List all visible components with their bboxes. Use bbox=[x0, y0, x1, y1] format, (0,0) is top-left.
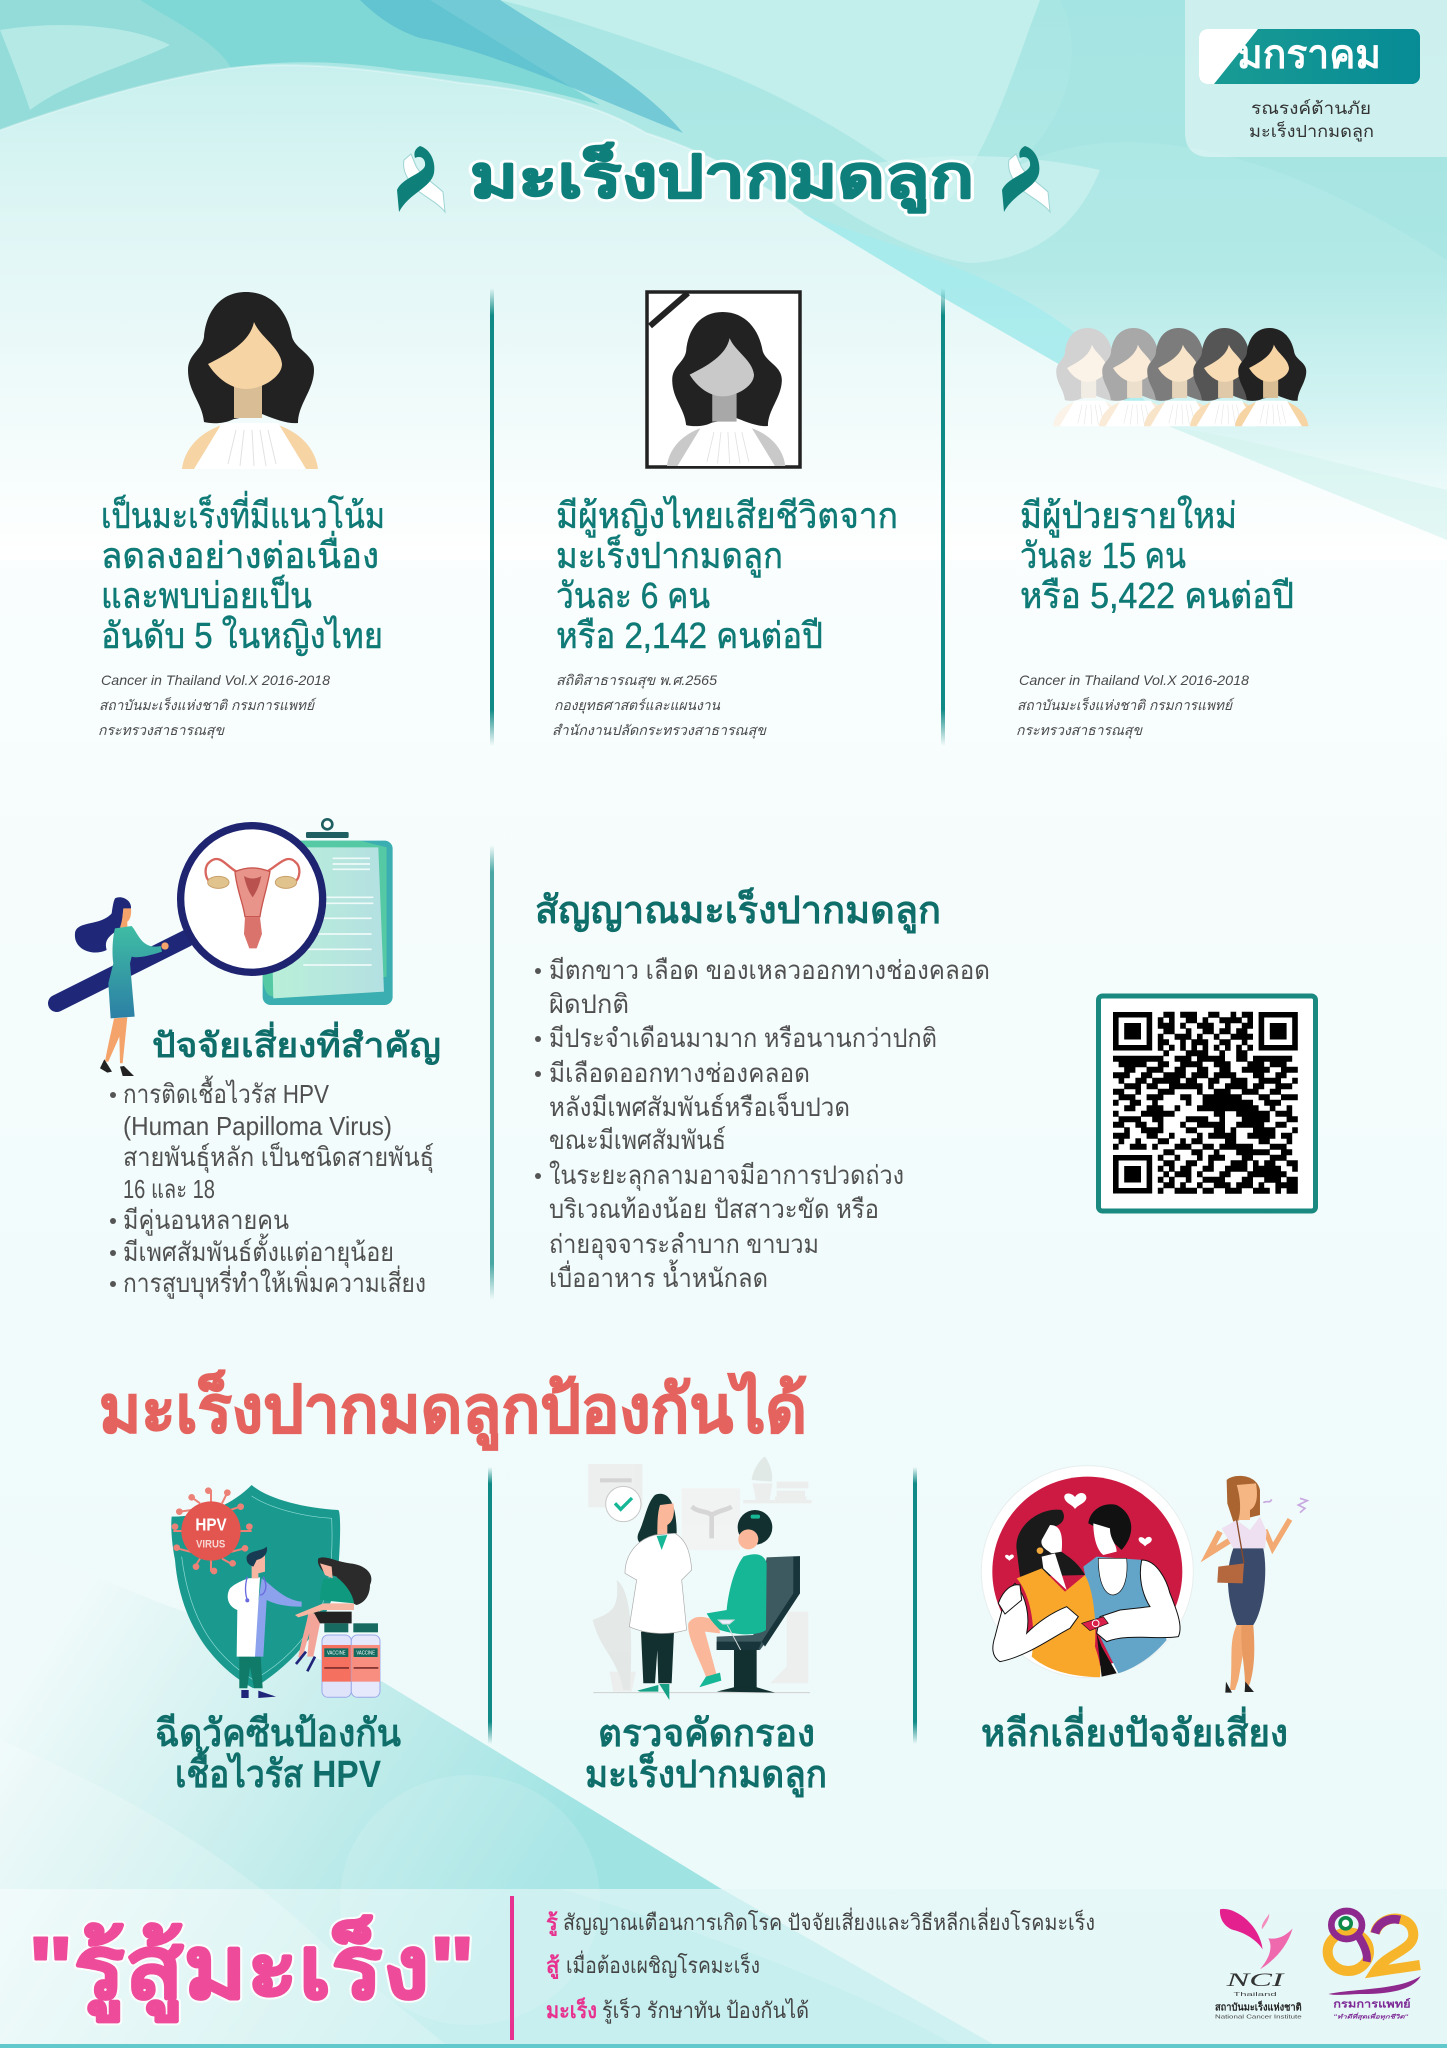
stat text: หรือ 2,142 คนต่อปี bbox=[556, 615, 823, 656]
list: risk factors: มีคู่นอนหลายคน bbox=[123, 1205, 289, 1236]
panel: trend statistic bbox=[98, 292, 385, 739]
logo: Department of Medical Services 82: "ทำดีที่สุดเพื่อทุกชีวิต" bbox=[1333, 2013, 1409, 2021]
source note: กองยุทธศาสตร์และแผนงาน bbox=[554, 697, 720, 714]
logo: National Cancer Institute: สถาบันมะเร็งแห่งชาติ bbox=[1215, 2000, 1302, 2014]
panel: new cases statistic bbox=[1016, 328, 1308, 739]
logo: National Cancer Institute: National Cancer Institute bbox=[1215, 2015, 1302, 2021]
title: มะเร็งปากมดลูก bbox=[470, 142, 974, 213]
label: screening: ตรวจคัดกรอง bbox=[598, 1713, 815, 1755]
slogan explanation: สัญญาณเตือนการเกิดโรค ปัจจัยเสี่ยงและวิธีหลีกเลี่ยงโรคมะเร็ง bbox=[563, 1907, 1095, 1935]
icon: woman bbox=[182, 292, 318, 469]
list: risk factors: การสูบบุหรี่ทำให้เพิ่มความเสี่ยง bbox=[123, 1265, 426, 1299]
list: risk factors: การติดเชื้อไวรัส HPV bbox=[123, 1075, 330, 1109]
logo: National Cancer Institute bbox=[1215, 1909, 1302, 2021]
heading: warning signs: สัญญาณมะเร็งปากมดลูก bbox=[535, 887, 941, 934]
illustration: doctor and patient bbox=[588, 1457, 812, 1700]
icon: five women bbox=[1053, 328, 1308, 426]
dividers: statistics row bbox=[490, 288, 494, 746]
stat text: วันละ 6 คน bbox=[556, 575, 710, 616]
source note: กระทรวงสาธารณสุข bbox=[1016, 722, 1143, 739]
slogan: "รู้สู้มะเร็ง" bbox=[28, 1914, 475, 2023]
illustration: couple and smoking woman bbox=[981, 1466, 1307, 1693]
list: warning signs: เบื่ออาหาร น้ำหนักลด bbox=[549, 1259, 768, 1293]
list: risk factors: (Human Papilloma Virus) bbox=[123, 1111, 392, 1141]
heading: risk factors: ปัจจัยเสี่ยงที่สำคัญ bbox=[152, 1021, 441, 1066]
stat text: อันดับ 5 ในหญิงไทย bbox=[101, 615, 383, 656]
stat text: เป็นมะเร็งที่มีแนวโน้ม bbox=[101, 491, 385, 536]
source note bbox=[98, 672, 330, 739]
illustration: HPV vaccination: VACCINE bbox=[356, 1651, 375, 1657]
logo: Department of Medical Services 82 bbox=[1328, 1911, 1421, 2021]
month tag panel bbox=[1185, 0, 1447, 157]
slogan: "รู้สู้มะเร็ง" bbox=[28, 1914, 475, 2023]
stat text: ลดลงอย่างต่อเนื่อง bbox=[101, 531, 379, 576]
stat text: และพบบ่อยเป็น bbox=[101, 573, 312, 616]
list: risk factors: สายพันธุ์หลัก เป็นชนิดสายพันธุ์ bbox=[123, 1141, 434, 1173]
panel: warning signs bbox=[535, 887, 990, 1293]
campaign text: มะเร็งปากมดลูก bbox=[1249, 120, 1374, 142]
illustration: HPV vaccination bbox=[171, 1485, 380, 1698]
label: vaccination: เชื้อไวรัส HPV bbox=[175, 1746, 382, 1796]
title: มะเร็งปากมดลูก bbox=[470, 142, 974, 213]
stat text bbox=[1020, 495, 1294, 616]
slogan explanation: รู้ bbox=[546, 1910, 558, 1937]
slogan explanation: มะเร็ง bbox=[546, 1996, 597, 2023]
source note: Cancer in Thailand Vol.X 2016-2018 bbox=[1019, 672, 1249, 688]
list: warning signs: ขณะมีเพศสัมพันธ์ bbox=[549, 1125, 726, 1155]
slogan explanation: เมื่อต้องเผชิญโรคมะเร็ง bbox=[566, 1950, 760, 1978]
illustration: HPV vaccination: VACCINE bbox=[327, 1651, 346, 1657]
illustration: HPV vaccination: VIRUS bbox=[196, 1538, 225, 1550]
panel: avoid risk factors bbox=[981, 1466, 1307, 1755]
logo: National Cancer Institute: Thailand bbox=[1233, 1992, 1277, 1998]
slogan explanation: สู้ bbox=[546, 1953, 560, 1980]
source note: สถาบันมะเร็งแห่งชาติ กรมการแพทย์ bbox=[1017, 697, 1235, 713]
illustration: HPV vaccination: HPV bbox=[195, 1515, 227, 1535]
source note: Cancer in Thailand Vol.X 2016-2018 bbox=[101, 672, 330, 688]
panel: screening bbox=[585, 1457, 827, 1798]
heading: prevention: มะเร็งปากมดลูกป้องกันได้ bbox=[99, 1369, 807, 1451]
label: avoid risk factors: หลีกเลี่ยงปัจจัยเสี่ยง bbox=[981, 1706, 1288, 1755]
source note bbox=[1016, 672, 1249, 739]
slogan explanation: รู้เร็ว รักษาทัน ป้องกันได้ bbox=[602, 1996, 809, 2024]
list: warning signs: มีเลือดออกทางช่องคลอด bbox=[549, 1058, 810, 1088]
month pill: มกราคม bbox=[1237, 33, 1381, 77]
list: risk factors: มีเพศสัมพันธ์ตั้งแต่อายุน้อย bbox=[123, 1233, 394, 1268]
logo: National Cancer Institute: NCI bbox=[1225, 1970, 1286, 1991]
panel: deaths statistic bbox=[552, 292, 898, 739]
list: warning signs: ในระยะลุกลามอาจมีอาการปวดถ่วง bbox=[549, 1160, 904, 1191]
source note bbox=[552, 672, 767, 739]
source note: กระทรวงสาธารณสุข bbox=[98, 722, 225, 739]
slogan divider bbox=[510, 1896, 514, 2040]
stat text: มีผู้หญิงไทยเสียชีวิตจาก bbox=[556, 495, 898, 538]
QR code bbox=[1098, 996, 1316, 1211]
list: warning signs: มีตกขาว เลือด ของเหลวออกทางช่องคลอด bbox=[549, 955, 990, 985]
logo: Department of Medical Services 82: กรมการแพทย์ bbox=[1333, 1997, 1411, 2010]
stat text: มะเร็งปากมดลูก bbox=[556, 533, 783, 578]
list: risk factors bbox=[110, 1075, 434, 1299]
list: warning signs: บริเวณท้องน้อย ปัสสาวะขัด หรือ bbox=[549, 1194, 879, 1224]
list: warning signs: มีประจำเดือนมามาก หรือนานกว่าปกติ bbox=[549, 1023, 937, 1053]
source note: สถาบันมะเร็งแห่งชาติ กรมการแพทย์ bbox=[99, 697, 317, 713]
list: risk factors: 16 และ 18 bbox=[123, 1174, 215, 1204]
panel: vaccination bbox=[155, 1485, 401, 1796]
label: screening: มะเร็งปากมดลูก bbox=[585, 1751, 827, 1798]
list: warning signs: ถ่ายอุจจาระลำบาก ขาบวม bbox=[549, 1229, 819, 1260]
panel: risk factors bbox=[110, 1021, 441, 1299]
source note: สถิติสาธารณสุข พ.ศ.2565 bbox=[556, 672, 717, 689]
icon: left ribbon bbox=[397, 146, 445, 212]
illustration: woman with magnifier and clipboard bbox=[57, 819, 393, 1076]
list: warning signs: ผิดปกติ bbox=[549, 989, 629, 1019]
list: warning signs bbox=[535, 955, 990, 1293]
label: screening bbox=[585, 1713, 827, 1798]
label: vaccination: ฉีดวัคซีนป้องกัน bbox=[155, 1713, 401, 1755]
campaign text bbox=[1249, 99, 1374, 142]
label: vaccination bbox=[155, 1713, 401, 1796]
icon: right ribbon bbox=[1002, 146, 1050, 212]
dividers: prevention row bbox=[488, 1467, 492, 1744]
divider: middle row bbox=[490, 845, 494, 1300]
stat text: วันละ 15 คน bbox=[1020, 535, 1186, 576]
slogan explanation bbox=[546, 1907, 1095, 2024]
stat text bbox=[101, 491, 385, 656]
stat text: มีผู้ป่วยรายใหม่ bbox=[1020, 495, 1237, 538]
stat text bbox=[556, 495, 898, 656]
month pill bbox=[1199, 29, 1420, 84]
stat text: หรือ 5,422 คนต่อปี bbox=[1020, 575, 1294, 616]
source note: สำนักงานปลัดกระทรวงสาธารณสุข bbox=[552, 722, 767, 739]
icon: memorial portrait bbox=[647, 292, 800, 467]
list: warning signs: หลังมีเพศสัมพันธ์หรือเจ็บปวด bbox=[549, 1091, 850, 1122]
footer band background bbox=[0, 1889, 1447, 2048]
campaign text: รณรงค์ต้านภัย bbox=[1251, 99, 1371, 118]
